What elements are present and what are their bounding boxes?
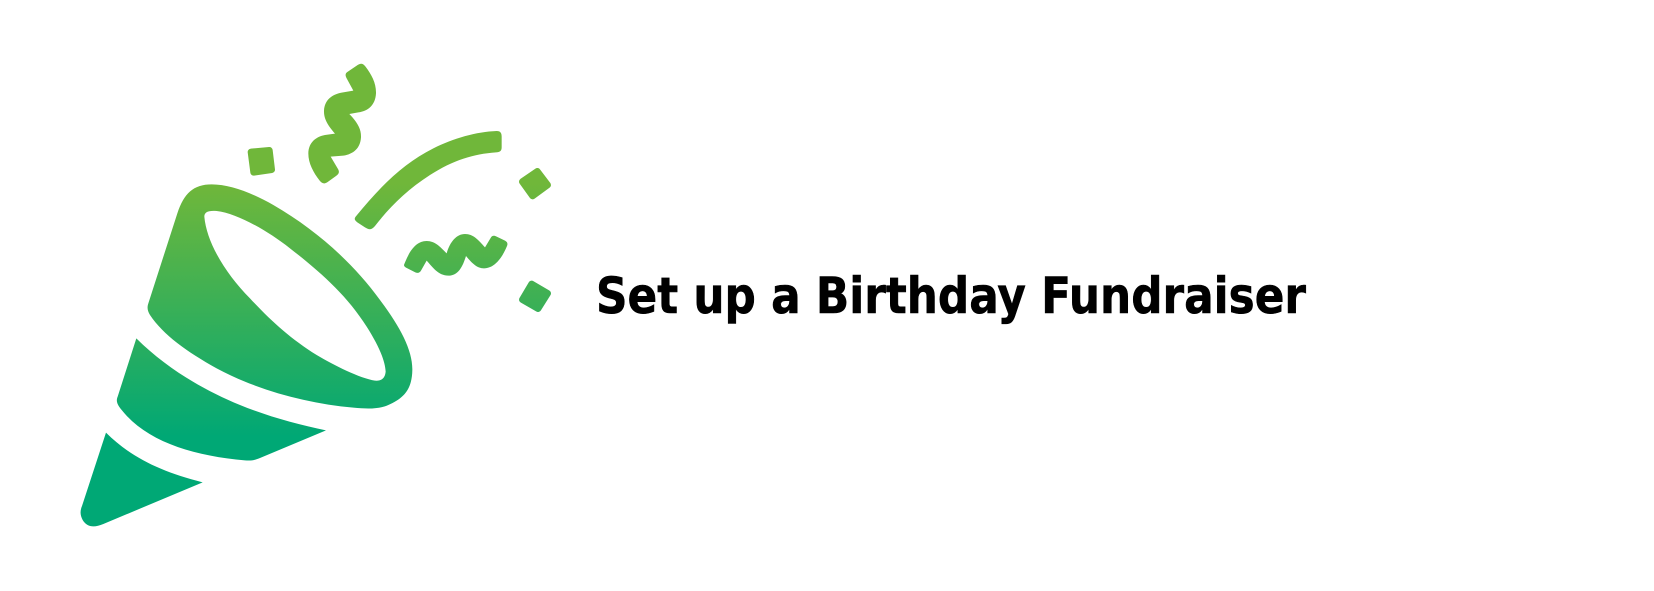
confetti: square top right [522,171,548,196]
confetti: square top left [251,150,272,172]
confetti: curved streamer [355,131,502,229]
confetti: squiggle right [404,234,507,276]
confetti: square bottom right [522,284,548,309]
popper cone: middle band [117,338,326,461]
confetti: squiggle top [308,64,376,183]
title: Set up a Birthday Fundraiser [596,267,1306,325]
icon: party popper [81,64,548,526]
popper cone: tip [81,433,203,526]
popper cone: top section with opening [148,184,412,409]
